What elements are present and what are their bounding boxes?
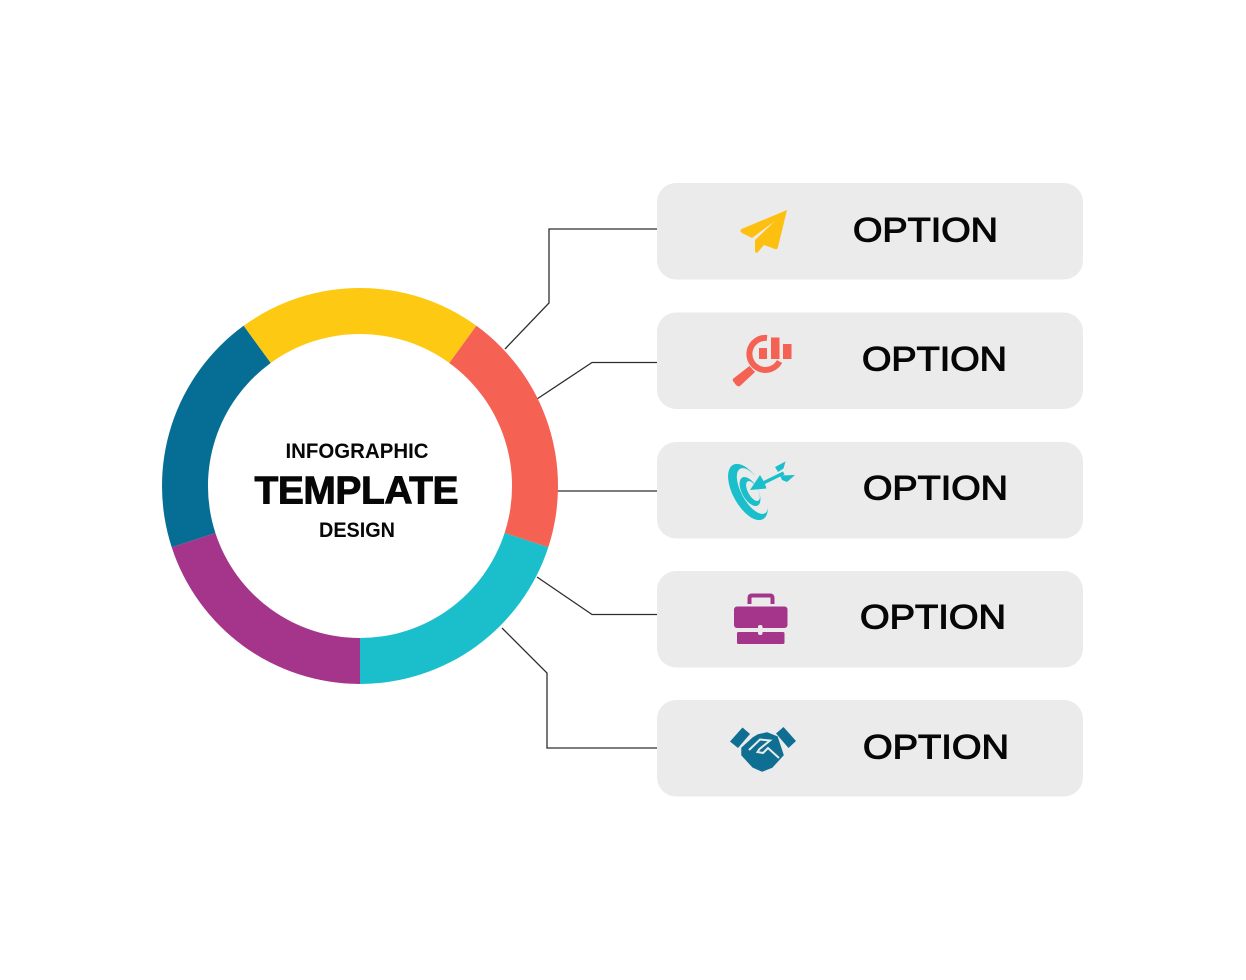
option 4 label: OPTION: [860, 598, 1006, 636]
donut ring: [162, 288, 558, 684]
center title: [254, 440, 458, 542]
title line: design: DESIGN: [319, 519, 395, 542]
segment: purple: [172, 533, 360, 684]
panel: option 4: [657, 571, 1083, 668]
segment: blue: [162, 326, 271, 547]
icon: magnifier with bars: [733, 338, 792, 386]
icon: paper plane: [740, 210, 787, 253]
icon: briefcase: [734, 596, 788, 644]
option 2 label: OPTION: [862, 340, 1007, 378]
icon: handshake: [730, 727, 796, 771]
option 5 label: OPTION: [863, 728, 1009, 766]
segment: cyan: [360, 533, 548, 684]
title line: template: TEMPLATE: [254, 470, 458, 512]
icon: target with arrow: [720, 458, 795, 526]
panel: option 2: [657, 312, 1083, 409]
panel: option 5: [657, 700, 1083, 796]
connector lines: [502, 229, 657, 748]
option 1 label: OPTION: [853, 212, 998, 250]
segment: yellow: [244, 288, 476, 363]
segment: coral: [449, 326, 558, 547]
panel: option 1: [657, 183, 1083, 280]
panel: option 3: [657, 442, 1083, 538]
title line: infographic: INFOGRAPHIC: [286, 440, 428, 463]
option 3 label: OPTION: [863, 470, 1008, 508]
